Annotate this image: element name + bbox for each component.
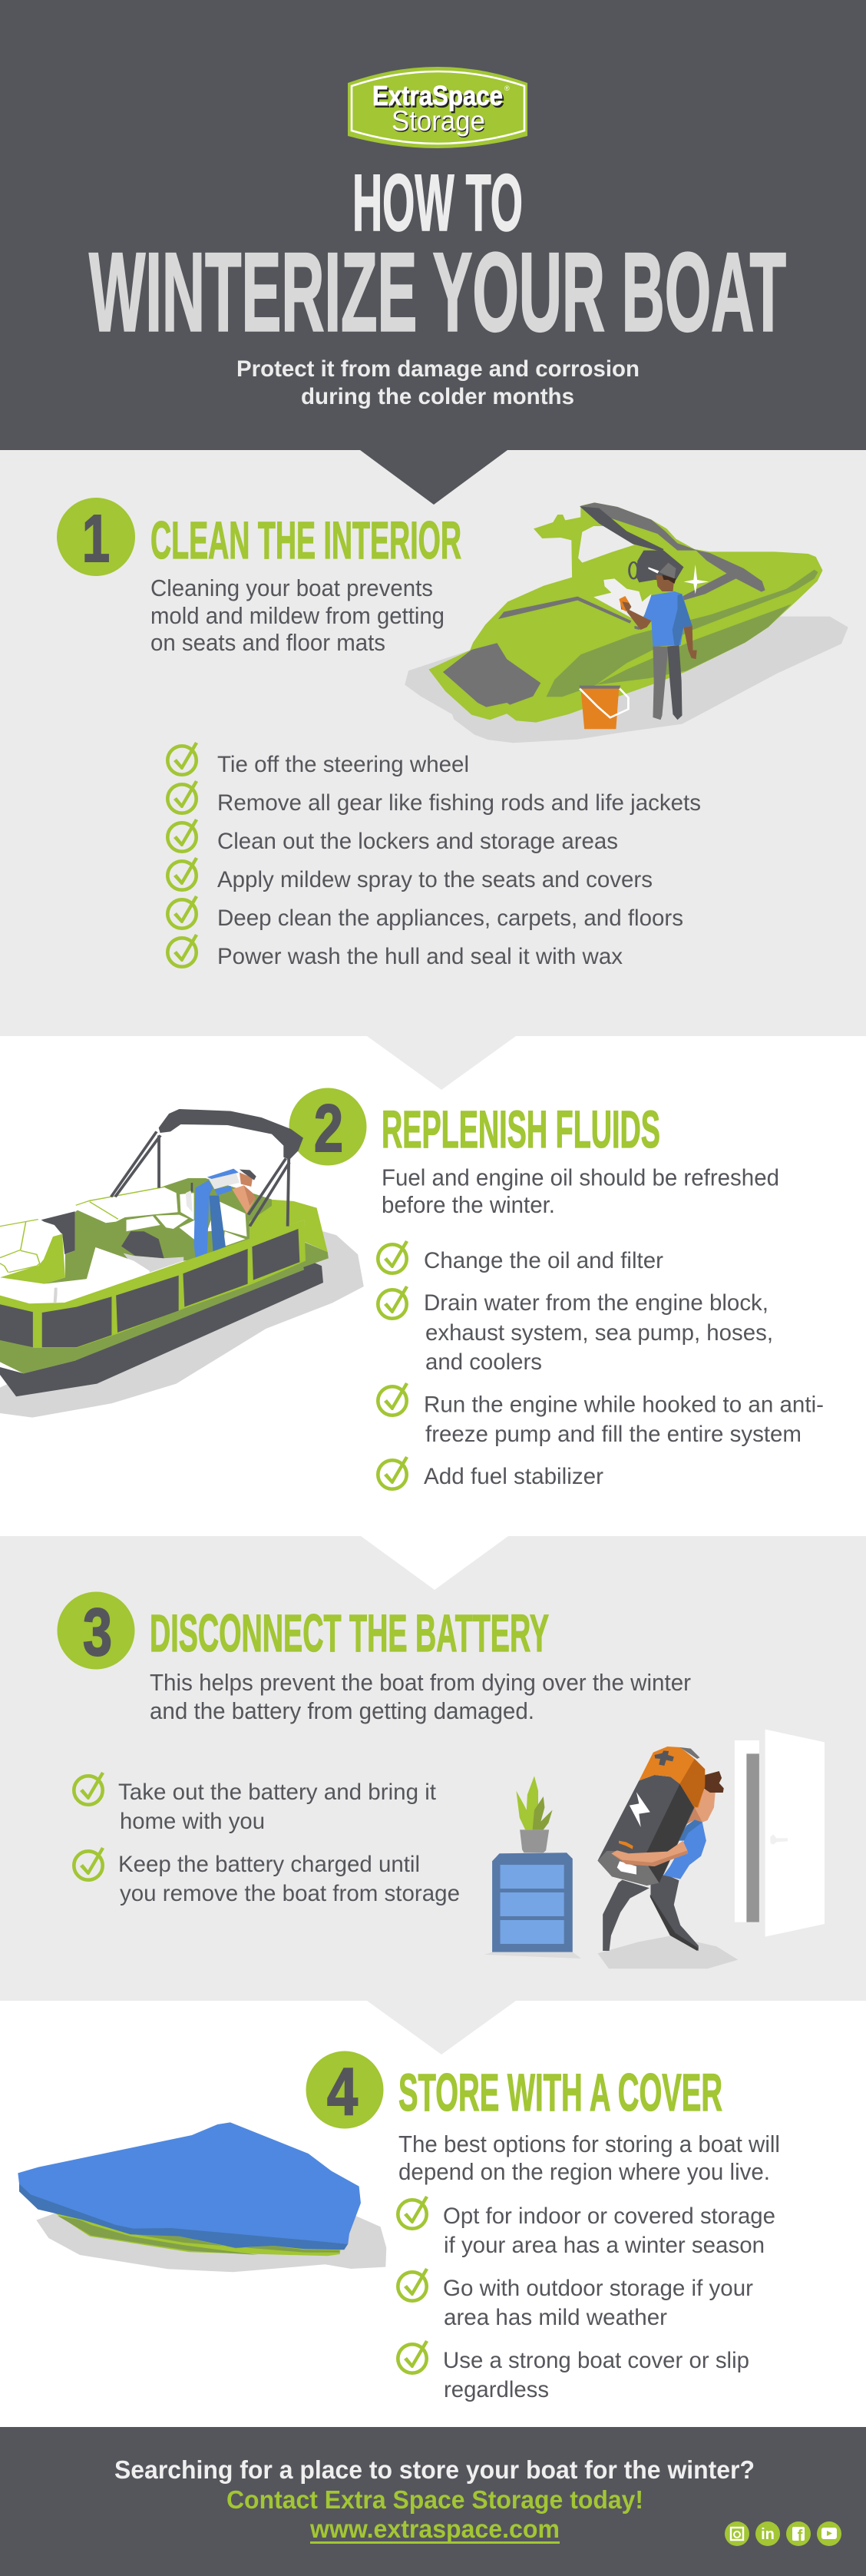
intro text: before the winter. (382, 1191, 555, 1218)
step number 3: 3 (83, 1595, 112, 1670)
checklist: Use a strong boat cover or slip (443, 2348, 749, 2373)
checklist (398, 2196, 775, 2402)
icon: instagram (725, 2521, 749, 2546)
logo: Extra Space Storage (348, 67, 527, 148)
intro text (150, 574, 445, 656)
checklist: Remove all gear like fishing rods and life jackets (217, 790, 701, 816)
checklist (378, 1240, 824, 1489)
illustration: man cleaning green speedboat (405, 502, 848, 743)
icon: person carrying battery (597, 1747, 724, 1951)
subtitle (236, 356, 640, 409)
checklist: Add fuel stabilizer (424, 1464, 603, 1489)
icon: facebook: f (798, 2528, 803, 2545)
intro text: Fuel and engine oil should be refreshed (382, 1164, 779, 1190)
subtitle: during the colder months (301, 384, 574, 409)
contact text: Contact Extra Space Storage today! (226, 2485, 643, 2514)
checklist: Power wash the hull and seal it with wax (217, 944, 623, 969)
icon: door (735, 1730, 825, 1937)
step number 2 (289, 1088, 367, 1166)
checklist: Drain water from the engine block, (424, 1290, 768, 1316)
checklist: Change the oil and filter (424, 1248, 663, 1273)
checklist: and coolers (425, 1349, 542, 1375)
icon: youtube (817, 2521, 841, 2546)
checklist: Apply mildew spray to the seats and covers (217, 867, 653, 892)
checklist: Run the engine while hooked to an anti- (424, 1392, 824, 1418)
intro text (150, 1669, 691, 1724)
icon: facebook (786, 2521, 811, 2546)
illustration: man working on green pontoon boat (0, 1109, 364, 1418)
panel: step 1 clean the interior (0, 450, 866, 1036)
question text: Searching for a place to store your boat for the winter? (114, 2455, 755, 2484)
checklist: Take out the battery and bring it (118, 1780, 437, 1805)
step number 4: 4 (327, 2055, 358, 2129)
step number 2: 2 (314, 1091, 343, 1166)
checklist (167, 742, 701, 969)
checklist: regardless (444, 2377, 549, 2402)
step number 3 (57, 1591, 135, 1670)
step number 4 (306, 2051, 384, 2129)
step number 1: 1 (82, 502, 110, 576)
title line: how to: HOW TO (352, 158, 523, 248)
checklist: Go with outdoor storage if your (443, 2276, 753, 2301)
panel: step 3 disconnect the battery (0, 1536, 866, 2001)
checklist: freeze pump and fill the entire system (425, 1422, 802, 1447)
heading: DISCONNECT THE BATTERY (150, 1604, 549, 1663)
checklist: Tie off the steering wheel (217, 752, 469, 777)
intro text: This helps prevent the boat from dying over the winter (150, 1669, 691, 1696)
website link: www.extraspace.com (309, 2515, 560, 2543)
icon: linkedin: in (761, 2526, 775, 2543)
checklist (74, 1772, 460, 1906)
checklist: if your area has a winter season (444, 2233, 765, 2258)
intro text (382, 1164, 779, 1218)
illustration: boat under blue cover (18, 2122, 386, 2272)
icon: bucket (579, 686, 628, 729)
checklist: area has mild weather (444, 2305, 667, 2330)
intro text: Cleaning your boat prevents (150, 574, 433, 601)
panel: step 2 replenish fluids (0, 1036, 866, 1536)
icon: linkedin (755, 2521, 780, 2546)
panel: footer call to action (0, 2427, 866, 2576)
intro text: on seats and floor mats (150, 629, 385, 656)
checklist: Deep clean the appliances, carpets, and floors (217, 906, 683, 931)
panel: header (0, 0, 866, 505)
intro text: depend on the region where you live. (398, 2158, 770, 2185)
logo: Extra Space Storage: ExtraSpace (374, 81, 504, 114)
intro text: The best options for storing a boat will (398, 2131, 780, 2157)
intro text (398, 2131, 780, 2185)
logo: Extra Space Storage: Storage (392, 106, 486, 138)
icon: cabinet with plant (484, 1776, 581, 1958)
panel: step 4 store with a cover (0, 2001, 866, 2427)
logo: Extra Space Storage: Storage (392, 105, 485, 137)
intro text: mold and mildew from getting (150, 602, 445, 629)
logo: Extra Space Storage: ExtraSpace (372, 80, 503, 111)
heading: CLEAN THE INTERIOR (150, 511, 461, 570)
step number 1 (57, 498, 135, 576)
checklist: you remove the boat from storage (120, 1881, 460, 1906)
checklist: Keep the battery charged until (118, 1852, 420, 1877)
checklist: home with you (120, 1809, 265, 1834)
logo: Extra Space Storage: ® (504, 84, 510, 92)
checklist: Clean out the lockers and storage areas (217, 829, 618, 854)
subtitle: Protect it from damage and corrosion (236, 356, 640, 382)
illustration: person carrying battery past cabinet to door (484, 1730, 825, 1968)
checklist: Opt for indoor or covered storage (443, 2204, 775, 2229)
intro text: and the battery from getting damaged. (150, 1697, 534, 1724)
checklist: exhaust system, sea pump, hoses, (425, 1320, 773, 1346)
